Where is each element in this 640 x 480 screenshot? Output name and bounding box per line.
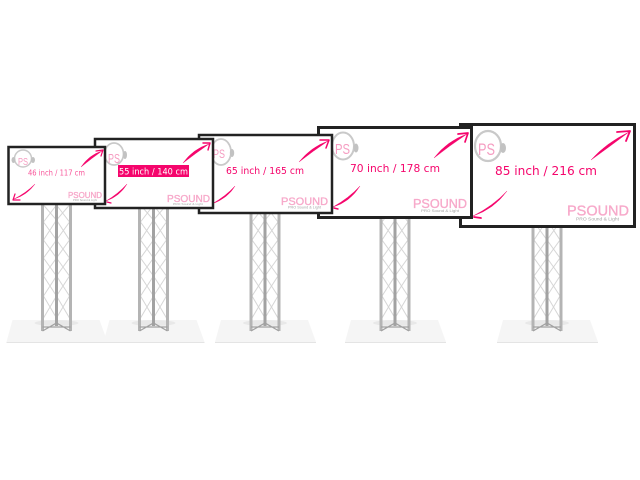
logo: PS headphones: PS <box>478 141 495 159</box>
screen: 65 inch <box>199 135 332 213</box>
arrow: down left <box>212 186 235 204</box>
screen: 55 inch <box>95 139 213 208</box>
brand: PSOUND: PRO Sound & Light <box>576 216 620 222</box>
arrow: up right <box>591 131 630 160</box>
screen: 85 inch <box>460 124 634 226</box>
stand: 55 inch truss and base <box>104 200 204 343</box>
arrow: up right <box>81 150 103 167</box>
logo: PS headphones <box>332 132 358 160</box>
brand: PSOUND: PSOUND <box>68 190 102 200</box>
logo: PS headphones: PS <box>213 149 225 161</box>
arrow: down left <box>333 186 360 209</box>
arrow: up right <box>299 140 329 162</box>
brand: PSOUND: PRO Sound & Light <box>288 206 321 210</box>
logo: PS headphones: PS <box>18 157 28 168</box>
arrow: down left <box>473 191 507 218</box>
brand: PSOUND: PSOUND <box>413 197 467 211</box>
logo: PS headphones <box>475 131 506 161</box>
stand: 65 inch truss and base <box>215 200 316 343</box>
arrow: down left <box>13 184 35 200</box>
arrow: down left <box>106 184 127 203</box>
size label: 85 inch / 216 cm <box>495 164 597 178</box>
brand: PSOUND: PRO Sound & Light <box>73 199 97 202</box>
logo: PS headphones: PS <box>335 141 350 158</box>
size label with highlight: 55 inch / 140 cm <box>119 168 188 178</box>
brand: PSOUND: PSOUND <box>281 196 328 208</box>
stand: 70 inch truss and base <box>345 200 446 343</box>
arrow: up right <box>183 143 210 163</box>
logo: PS headphones: PS <box>108 151 120 166</box>
brand: PSOUND: PSOUND <box>567 204 629 220</box>
size label: 46 inch / 117 cm <box>28 168 85 178</box>
screen: 46 inch <box>8 147 105 204</box>
brand: PSOUND: PRO Sound & Light <box>421 208 460 213</box>
stand: 85 inch truss and base <box>497 200 598 343</box>
brand: PSOUND: PSOUND <box>167 194 210 205</box>
brand: PSOUND: PRO Sound & Light <box>173 202 203 206</box>
stand: 46 inch truss and base <box>6 200 108 343</box>
arrow: up right <box>434 133 468 158</box>
size label: 70 inch / 178 cm <box>350 162 440 175</box>
size label: 65 inch / 165 cm <box>226 166 304 177</box>
screen: 70 inch <box>318 128 472 218</box>
